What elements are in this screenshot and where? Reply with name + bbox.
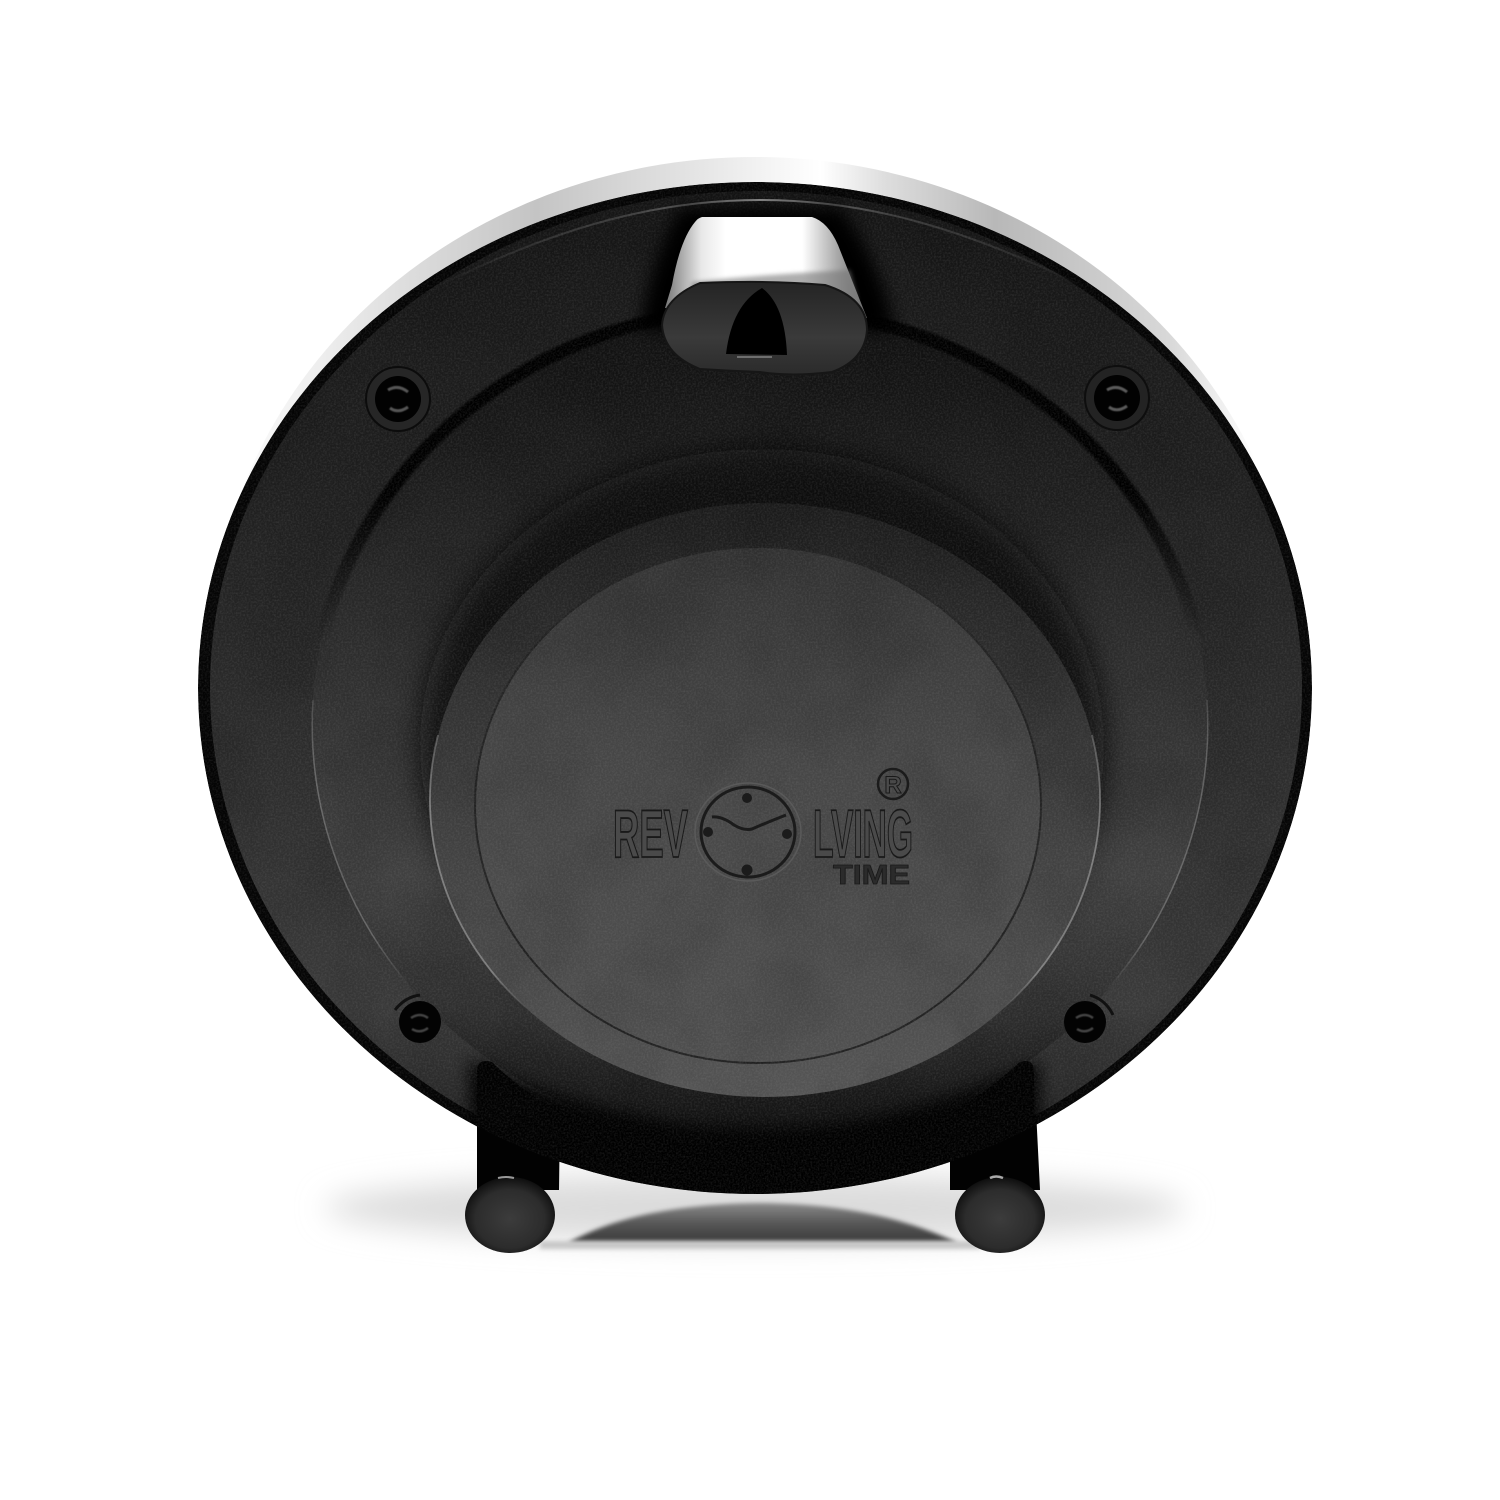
screw: top right [1085, 366, 1149, 430]
cast shadow on surface [325, 1174, 1185, 1249]
logo word: REV: REV [613, 796, 688, 872]
logo clock icon [695, 783, 801, 881]
screw: top left [366, 367, 430, 431]
left foot [465, 1177, 555, 1253]
back disc face [475, 547, 1041, 1063]
hook base [662, 282, 867, 374]
clock stand legs [477, 1060, 1040, 1190]
screw: bottom right [1064, 995, 1113, 1043]
product photo: clock rear view: LVING [813, 796, 913, 872]
raised centre ring [312, 305, 1208, 1145]
flange surface [210, 191, 1302, 1185]
right foot [955, 1176, 1045, 1253]
hook shadow [640, 208, 895, 330]
registered mark [878, 769, 908, 799]
product photo: clock rear view [198, 157, 1312, 1253]
registered mark: R [884, 772, 902, 799]
hook [640, 208, 895, 374]
logo: Revolving Time [613, 769, 913, 890]
ring groove at top [322, 308, 1198, 640]
hook metal [665, 217, 867, 318]
recess shadow around disc [406, 443, 1118, 882]
logo word: TIME: TIME [833, 859, 910, 890]
hanging hole [726, 288, 787, 355]
lower black band [470, 1060, 1040, 1200]
silver rim [210, 157, 1300, 1163]
ring highlight lines, lower sides [312, 700, 1208, 990]
flange edge [198, 182, 1312, 1194]
screw: bottom left [395, 995, 441, 1043]
back disc lip [430, 503, 1100, 1097]
lip highlight [430, 735, 1100, 1007]
surface texture [198, 182, 1312, 1194]
hook chipped edge [690, 270, 858, 300]
stand upright shoulders [477, 1061, 1034, 1190]
clock body back plate [198, 182, 1312, 1200]
hole highlight [737, 356, 772, 358]
thin highlight at top of plate [430, 200, 1090, 290]
